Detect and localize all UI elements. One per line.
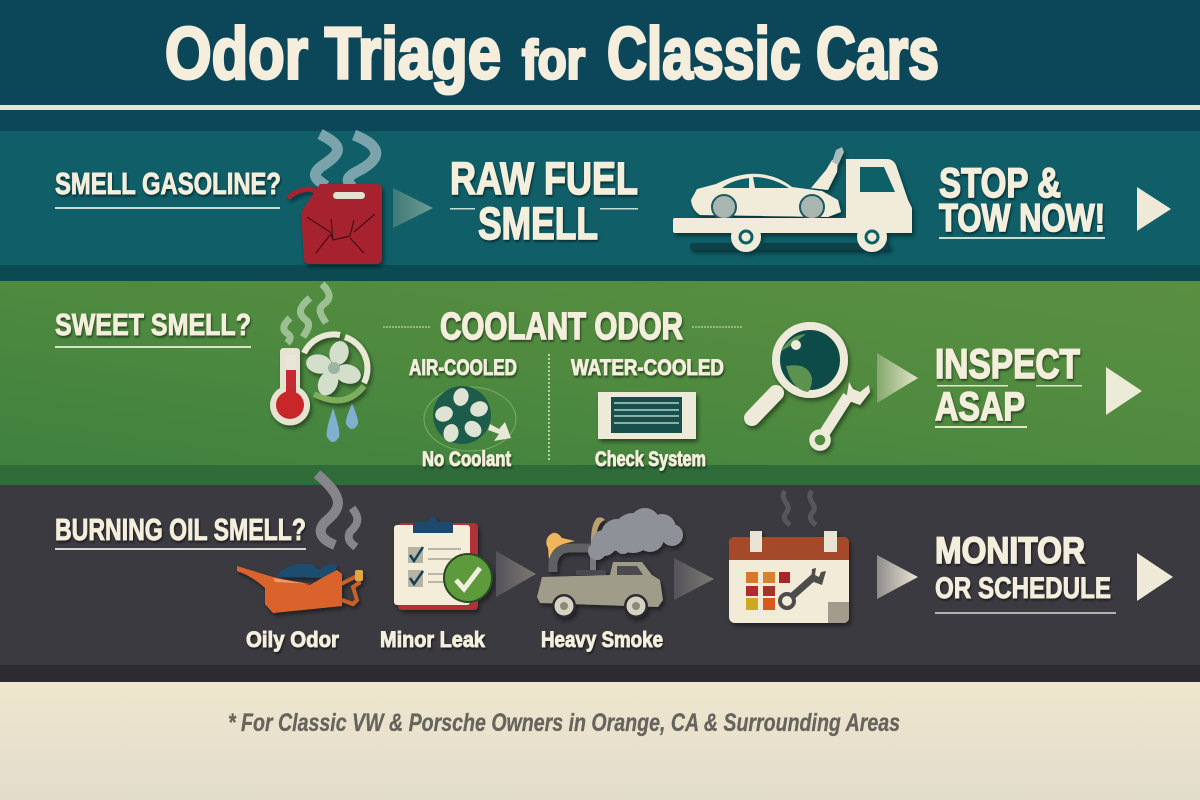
arrow bbox=[1137, 553, 1173, 601]
footnote: * For Classic VW & Porsche Owners in Orange, CA & Surrounding Areas bbox=[228, 709, 900, 737]
arrow bbox=[674, 558, 714, 600]
icon: smoking pickup truck bbox=[537, 508, 683, 618]
action: inspect asap bbox=[935, 340, 1082, 429]
question: burning oil smell: BURNING OIL SMELL? bbox=[55, 512, 306, 547]
arrow bbox=[393, 188, 433, 228]
icon: orange oil can bbox=[237, 564, 363, 613]
branch: water-cooled: Check System bbox=[595, 448, 706, 471]
panel: burning oil row bbox=[0, 474, 1200, 682]
icon: magnifier and wrench bbox=[752, 326, 870, 448]
action: stop and tow now bbox=[939, 159, 1105, 240]
title bbox=[165, 14, 939, 94]
branch: air-cooled: AIR-COOLED bbox=[409, 355, 517, 380]
action: monitor or schedule bbox=[935, 530, 1116, 614]
branch: air-cooled bbox=[409, 355, 517, 471]
heading: coolant odor: COOLANT ODOR bbox=[440, 306, 683, 348]
label: raw fuel smell: RAW FUEL bbox=[450, 153, 638, 204]
icon: thermometer, fan and coolant drops bbox=[270, 284, 367, 442]
action: stop and tow now: TOW NOW! bbox=[939, 197, 1105, 240]
icon: clipboard with check bbox=[394, 515, 492, 610]
label: oily odor: Oily Odor bbox=[246, 627, 339, 652]
title: Classic Cars bbox=[607, 14, 939, 94]
panel: footer note bbox=[0, 682, 1200, 800]
title: Odor Triage bbox=[165, 14, 501, 94]
label: raw fuel smell bbox=[450, 153, 638, 249]
panel: sweet smell row bbox=[0, 281, 1200, 485]
action: stop and tow now: STOP & bbox=[939, 159, 1061, 206]
arrow bbox=[877, 353, 918, 403]
question: sweet smell: SWEET SMELL? bbox=[55, 307, 251, 342]
icon: service calendar bbox=[729, 491, 849, 623]
divider: dotted bbox=[548, 354, 550, 460]
label: minor leak: Minor Leak bbox=[380, 627, 485, 652]
label: heavy smoke: Heavy Smoke bbox=[541, 627, 663, 652]
arrow bbox=[877, 555, 918, 599]
question: smell gasoline: SMELL GASOLINE? bbox=[55, 166, 281, 201]
label: raw fuel smell: SMELL bbox=[478, 198, 598, 249]
branch: water-cooled: WATER-COOLED bbox=[571, 355, 724, 380]
icon: grey fumes bbox=[317, 474, 357, 547]
panel: gasoline row bbox=[0, 131, 1200, 281]
icon: tow truck carrying car bbox=[673, 147, 912, 252]
action: monitor or schedule: MONITOR bbox=[935, 530, 1085, 571]
action: inspect asap: INSPECT bbox=[935, 340, 1080, 387]
branch: air-cooled: No Coolant bbox=[422, 448, 511, 471]
icon: red fuel can with fumes bbox=[288, 134, 382, 264]
branch: water-cooled bbox=[571, 355, 724, 471]
icon: air-cooled fan bbox=[424, 386, 516, 451]
panel: header bbox=[0, 0, 1200, 131]
title: for bbox=[522, 28, 585, 90]
action: inspect asap: ASAP bbox=[935, 385, 1025, 429]
action: monitor or schedule: OR SCHEDULE bbox=[935, 572, 1111, 605]
arrow bbox=[496, 551, 536, 597]
arrow bbox=[1106, 367, 1142, 415]
icon: radiator bbox=[598, 392, 696, 439]
arrow bbox=[1137, 187, 1171, 231]
